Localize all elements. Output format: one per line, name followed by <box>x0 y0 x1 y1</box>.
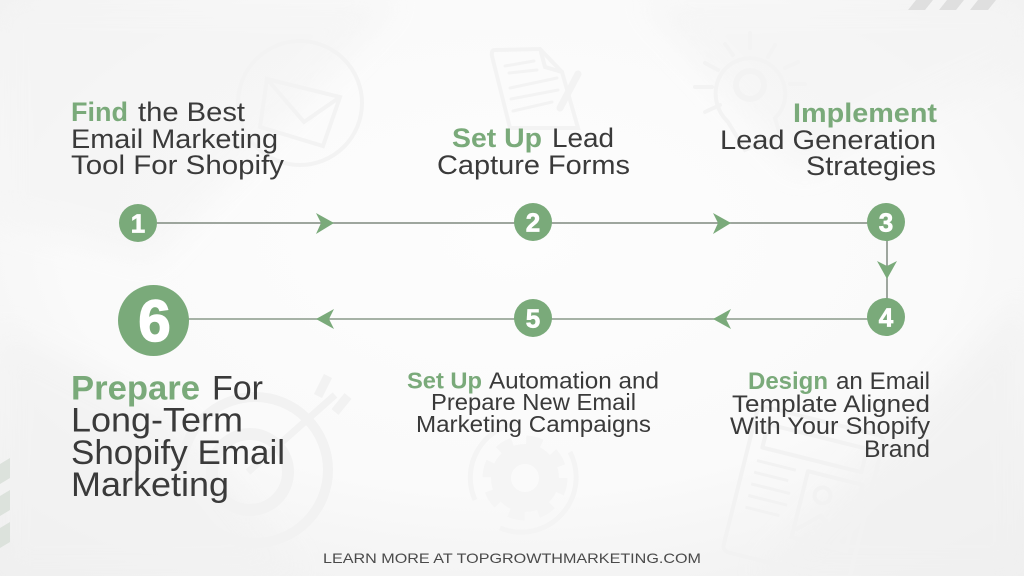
step 2 text: Set Up <box>452 123 542 153</box>
step 4 text: an Email <box>836 368 930 395</box>
step 3 text: Implement <box>793 98 937 128</box>
step 2 text <box>437 123 630 180</box>
step 6 marker: 6 <box>138 289 171 354</box>
step 6 marker <box>118 285 189 356</box>
step 4 text: Template Aligned <box>732 391 930 418</box>
step 3 text: Lead Generation <box>720 125 936 155</box>
step 3 text <box>720 98 937 181</box>
watermark icon: envelope <box>238 41 362 165</box>
step 4 text <box>730 368 930 463</box>
decorative stripes: top right <box>908 0 996 10</box>
step 6 text: Long-Term <box>71 402 243 440</box>
step 5 marker <box>514 299 552 337</box>
step 4 text: Design <box>748 368 828 395</box>
step 4 marker <box>867 298 905 336</box>
step 6 text <box>71 370 285 504</box>
decorative stripes: left edge <box>0 458 10 548</box>
step 5 text: Prepare New Email <box>431 389 636 415</box>
step 1 text: the Best <box>138 97 246 127</box>
connector line: step 4 to 6 <box>185 318 868 320</box>
step 2 text: Lead <box>552 123 614 153</box>
step 5 text <box>407 368 659 437</box>
step 5 text: Marketing Campaigns <box>416 411 651 437</box>
step 6 text: Marketing <box>71 466 229 504</box>
step 1 text: Tool For Shopify <box>71 150 285 180</box>
step 4 marker: 4 <box>879 302 894 332</box>
step 3 marker: 3 <box>879 208 893 238</box>
step 2 marker: 2 <box>526 208 540 238</box>
step 1 text: Find <box>71 97 128 127</box>
arrow: step 4 to 5 <box>713 309 731 329</box>
step 6 text: For <box>212 370 263 408</box>
footer call to action: LEARN MORE AT TOPGROWTHMARKETING.COM <box>323 550 701 566</box>
step 1 text <box>71 97 285 180</box>
step 2 marker <box>514 203 552 241</box>
step 4 text: Brand <box>864 436 930 463</box>
step 1 marker <box>119 204 157 242</box>
connector line: step 3 to 4 <box>886 240 888 300</box>
arrow: step 3 to 4 <box>877 261 897 279</box>
watermark icon: gear and cycle <box>470 423 576 532</box>
step 3 marker <box>867 203 905 241</box>
step 5 marker: 5 <box>526 304 540 334</box>
step 2 text: Capture Forms <box>437 150 630 180</box>
watermark icon: target with arrow <box>182 376 348 543</box>
step 5 text: Set Up <box>407 368 482 394</box>
step 4 text: With Your Shopify <box>730 413 930 440</box>
watermark icon: document and pencil <box>492 49 578 128</box>
watermark icon: light bulb with gear <box>695 33 805 150</box>
step 1 marker: 1 <box>131 208 145 238</box>
step 3 text: Strategies <box>806 151 936 181</box>
step 6 text: Prepare <box>71 370 200 408</box>
step 5 text: Automation and <box>489 368 659 394</box>
step 1 text: Email Marketing <box>71 124 278 154</box>
step 6 text: Shopify Email <box>71 434 285 472</box>
arrow: step 5 to 6 <box>316 309 334 329</box>
connector line: step 1 to 3 <box>157 222 868 224</box>
arrow: step 2 to 3 <box>713 213 731 234</box>
watermark icon: web page layout <box>722 405 885 576</box>
arrow: step 1 to 2 <box>316 213 334 234</box>
